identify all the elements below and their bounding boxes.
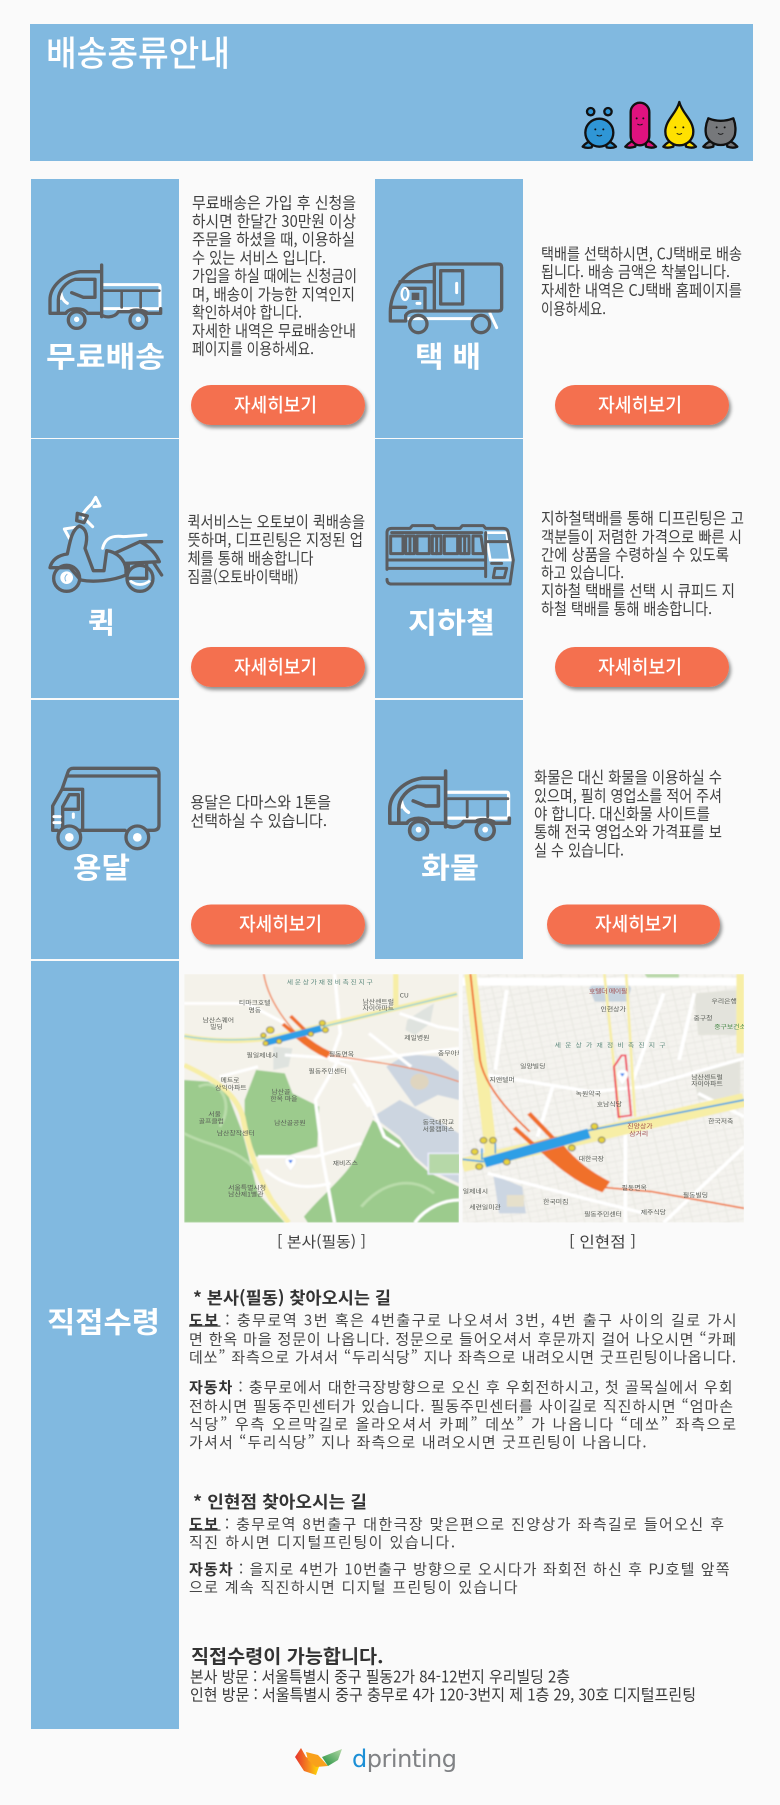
map: 본사(필동): 서울특별시청 <box>228 1183 266 1192</box>
button: 무료배송 자세히보기 <box>191 385 365 425</box>
label: 용달: 용달 <box>73 845 130 887</box>
header banner <box>30 24 753 161</box>
icon: subway train <box>387 526 513 584</box>
map: 본사(필동): 동국대학교 <box>423 1118 454 1126</box>
icon: logo mark <box>295 1748 342 1775</box>
button: 무료배송 자세히보기: 자세히보기 <box>234 390 317 418</box>
text: 용달 description: 선택하실 수 있습니다. <box>190 808 327 832</box>
text: 퀵 description <box>188 508 365 588</box>
caption: 본사(필동): [ 본사(필동) ] <box>277 1231 366 1252</box>
button: 용달 자세히보기: 자세히보기 <box>239 910 322 936</box>
text: 지하철 description: 하고 있습니다. <box>541 560 624 584</box>
button: 택배 자세히보기 <box>555 385 729 425</box>
map: 본사(필동): 명동 <box>248 1006 261 1015</box>
panel: 화물 <box>375 700 523 959</box>
button: 택배 자세히보기: 자세히보기 <box>598 390 682 418</box>
text: 무료배송 description: 무료배송은 가입 후 신청을 <box>192 190 356 214</box>
button: 지하철 자세히보기: 자세히보기 <box>598 652 682 680</box>
text: 퀵 description: 뜻하며, 디프린팅은 지정된 업 <box>188 526 363 550</box>
label: 무료배송: 무료배송 <box>46 334 165 376</box>
map: 인현점: 세운상가재정비촉진지구 <box>555 1041 666 1049</box>
panel: 퀵 <box>31 439 179 698</box>
map: 본사(필동): 필동주민센터 <box>309 1067 347 1075</box>
text: 본사 자동차: 식당” 우측 오르막길로 올라오셔서 카페” 데쏘” 가 나옵니다 “데쏘” 좌측으로 <box>189 1414 736 1434</box>
button: 용달 자세히보기 <box>191 904 365 944</box>
map: 인현점: 녹원약국 <box>576 1089 601 1098</box>
icon: scooter <box>50 497 162 591</box>
map: 인현점: 대한극장 <box>579 1154 604 1163</box>
text: 인현점 도보 <box>189 1514 724 1552</box>
text: 인현점 도보: 도보 : 충무로역 8번출구 대한극장 맞은편으로 진양상가 좌측길로 들어오신 후 <box>189 1514 724 1534</box>
logo: dprinting <box>295 1745 457 1775</box>
text: 본사 자동차: 가셔서 “두리식당” 지나 좌측으로 내려오시면 굿프린팅이 나옵니다. <box>189 1432 646 1452</box>
map: 본사(필동): 자이아파트 <box>362 1004 394 1013</box>
panel: 택배 <box>375 179 523 438</box>
panel: 직접수령 <box>31 961 179 1729</box>
text: 용달 description: 용달은 다마스와 1톤을 <box>190 789 331 813</box>
map: 본사(필동): 빌딩 <box>210 1022 223 1031</box>
text: 인현점 도보: 직진 하시면 디지털프린팅이 있습니다. <box>189 1532 455 1552</box>
text: 용달 description <box>190 789 331 832</box>
text: 택배 description <box>541 240 742 320</box>
text: 무료배송 description: 확인하셔야 합니다. <box>192 299 302 323</box>
map: 본사(필동): 삼익아파트 <box>215 1083 247 1092</box>
text: 화물 description: 있으며, 필히 영업소를 적어 주셔 <box>534 782 722 806</box>
text: 지하철 description: 객분들이 저렴한 가격으로 빠른 시 <box>541 524 742 548</box>
text: 지하철 description: 간에 상품을 수령하실 수 있도록 <box>541 542 729 566</box>
text: 무료배송 description: 페이지를 이용하세요. <box>192 336 314 360</box>
icon: cargo truck <box>390 771 509 839</box>
icon: CMYK mascots <box>583 102 737 148</box>
text: 화물 description: 실 수 있습니다. <box>534 837 624 861</box>
map: 인현점: 호남식당 <box>597 1100 622 1109</box>
map: 본사(필동): 남산창작센터 <box>217 1129 255 1138</box>
text: 화물 description <box>534 764 722 861</box>
map: 본사(필동): 제일병원 <box>404 1033 430 1042</box>
text: 화물 description: 화물은 대신 화물을 이용하실 수 <box>534 764 722 788</box>
caption: 인현점: [ 인현점 ] <box>569 1231 636 1252</box>
text: 본사 도보 <box>189 1310 736 1368</box>
map: 인현점: 인현상가 <box>601 1005 626 1013</box>
map: 인현점: 일제네시 <box>463 1187 488 1195</box>
panel: 무료배송 <box>31 179 179 438</box>
text: 지하철 description: 지하철택배를 통해 디프린팅은 고 <box>541 505 744 529</box>
text: 본사 자동차: 전하시면 필동주민센터가 있습니다. 필동주민센터를 사이길로 직진하시면 “엄마손 <box>189 1396 733 1416</box>
text: 무료배송 description: 주문을 하셨을 때, 이용하실 <box>192 226 355 250</box>
map: 본사(필동): 세운상가재정비촉진지구 <box>287 978 373 986</box>
label: 택배: 택 배 <box>415 334 481 376</box>
map: 본사(필동): 메트로 <box>221 1076 240 1085</box>
icon: free delivery truck <box>50 265 161 328</box>
map: 본사(필동): 충무아트 <box>438 1049 463 1058</box>
map: 인현점: 자이아파트 <box>691 1079 723 1088</box>
directions: 본사(필동) <box>189 1284 736 1452</box>
button: 퀵 자세히보기: 자세히보기 <box>234 652 317 680</box>
map: 인현점: 중구보건소 <box>714 1022 746 1031</box>
text: 퀵 description: 짐콜(오토바이택배) <box>188 564 298 588</box>
label: 직접수령: 직접수령 <box>47 1300 160 1342</box>
map: 인현점: 세련일미관 <box>469 1203 501 1211</box>
map: 본사(필동): 남산센트럴 <box>362 997 394 1006</box>
map: 본사(필동): 골프클럽 <box>199 1117 224 1125</box>
text: 지하철 description: 하철 택배를 통해 배송합니다. <box>541 596 712 620</box>
text: 직접수령 안내: 인현 방문 : 서울특별시 중구 충무로 4가 120-3번지 제 1층 29, 30호 디지털프린팅 <box>190 1682 696 1706</box>
text: 직접수령 안내 <box>190 1642 696 1706</box>
wordmark: dprinting <box>352 1745 457 1773</box>
text: 본사 도보: 데쏘” 좌측으로 가셔서 “두리식당” 지나 좌측으로 내려오시면 굿프린팅이나옵니다. <box>189 1346 736 1368</box>
map: 인현점: 중구청 <box>694 1014 713 1023</box>
map: 인현점: 지앤텔머 <box>490 1075 515 1084</box>
text: 지하철 description: 지하철 택배를 선택 시 큐피드 지 <box>541 578 735 602</box>
map: 본사(필동): 남산제1별관 <box>228 1190 264 1199</box>
map: 본사(필동) <box>184 974 463 1223</box>
heading: 인현점 찾아오시는 길: * 인현점 찾아오시는 길 <box>193 1488 367 1513</box>
text: 무료배송 description: 하시면 한달간 30만원 이상 <box>192 208 356 232</box>
map: 본사(필동): 필일제네시 <box>247 1051 278 1060</box>
text: 퀵 description: 퀵서비스는 오토보이 퀵배송을 <box>188 508 365 532</box>
text: 택배 description: 됩니다. 배송 금액은 착불입니다. <box>541 258 730 282</box>
icon: box truck <box>53 768 159 849</box>
map: 인현점: 한국미집 <box>543 1197 568 1206</box>
panel: 지하철 <box>375 439 523 698</box>
map: 인현점: 필동면옥 <box>622 1183 647 1192</box>
heading: 본사 찾아오시는 길: * 본사(필동) 찾아오시는 길 <box>193 1284 391 1309</box>
text: 지하철 description <box>541 505 744 620</box>
button: 퀵 자세히보기 <box>191 647 365 687</box>
text: 직접수령 안내: 직접수령이 가능합니다. <box>191 1642 384 1669</box>
text: 직접수령 안내: 본사 방문 : 서울특별시 중구 필동2가 84-12번지 우리빌딩 2층 <box>190 1664 570 1688</box>
label: 퀵: 퀵 <box>88 600 115 642</box>
text: 본사 도보: 도보 : 충무로역 3번 혹은 4번출구로 나오셔서 3번, 4번 출구 사이의 길로 가시 <box>189 1310 736 1330</box>
button: 화물 자세히보기: 자세히보기 <box>595 910 678 936</box>
text: 인현점 자동차: 자동차 : 을지로 4번가 10번출구 방향으로 오시다가 좌회전 하신 후 PJ호텔 앞쪽 <box>189 1558 730 1580</box>
text: 화물 description: 야 합니다. 대신화물 사이트를 <box>534 800 710 824</box>
label: 화물: 화물 <box>421 845 479 887</box>
button: 화물 자세히보기 <box>547 904 720 944</box>
button: 지하철 자세히보기 <box>555 647 729 687</box>
map: 인현점: 남산센트럴 <box>691 1073 723 1081</box>
text: 무료배송 description: 수 있는 서비스 입니다. <box>192 244 326 268</box>
map: 본사(필동): 서울캠퍼스 <box>423 1125 454 1133</box>
text: 택배 description: 택배를 선택하시면, CJ택배로 배송 <box>541 240 742 264</box>
text: 퀵 description: 체를 통해 배송합니다 <box>188 545 314 569</box>
map: 인현점: 한국저축 <box>708 1117 733 1125</box>
map: 본사(필동): 티마크호텔 <box>239 998 271 1007</box>
label: 지하철: 지하철 <box>408 600 495 642</box>
map: 본사(필동): 남산골 <box>271 1087 290 1096</box>
map: 인현점: 호텔더 메이필 <box>589 987 627 996</box>
text: 인현점 자동차: 으로 계속 직진하시면 디지털 프린팅이 있습니다 <box>189 1576 518 1598</box>
text: 무료배송 description: 며, 배송이 가능한 지역인지 <box>192 281 355 305</box>
map: 본사(필동): 필동면옥 <box>329 1050 354 1059</box>
map: 인현점: 필동빌딩 <box>683 1191 708 1199</box>
map: 인현점: 삼거리 <box>629 1129 648 1138</box>
map: 본사(필동): 한옥 마을 <box>270 1094 298 1103</box>
map: 인현점: 진양상가 <box>627 1122 653 1130</box>
map: 본사(필동): 서울 <box>208 1110 221 1119</box>
map: 인현점: 제주식당 <box>641 1208 666 1217</box>
text: 화물 description: 통해 전국 영업소와 가격표를 보 <box>534 818 722 842</box>
directions: 인현점 <box>189 1488 730 1598</box>
map: 본사(필동): 남산골공원 <box>274 1118 306 1127</box>
text: 무료배송 description <box>192 190 357 360</box>
title: 배송종류안내 <box>46 26 230 77</box>
map: 인현점 <box>462 974 746 1223</box>
text: 무료배송 description: 자세한 내역은 무료배송안내 <box>192 318 356 342</box>
map: 인현점: 일양빌딩 <box>520 1062 546 1070</box>
text: 택배 description: 자세한 내역은 CJ택배 홈페이지를 <box>541 277 742 301</box>
map: 본사(필동): CU <box>400 991 409 1000</box>
map: 인현점: 필동주민센터 <box>584 1210 622 1219</box>
text: 인현점 자동차 <box>189 1558 730 1598</box>
text: 본사 자동차 <box>189 1376 736 1452</box>
text: 택배 description: 이용하세요. <box>541 296 606 320</box>
map: 인현점: 우리은행 <box>712 997 737 1006</box>
map: 본사(필동): 남산스퀘어 <box>203 1016 234 1024</box>
map: 본사(필동): 재비즈스 <box>333 1159 358 1168</box>
icon: parcel van <box>390 264 502 333</box>
text: 무료배송 description: 가입을 하실 때에는 신청금이 <box>192 262 357 286</box>
text: 본사 자동차: 자동차 : 충무로에서 대한극장방향으로 오신 후 우회전하시고, 첫 골목실에서 우회 <box>189 1376 732 1398</box>
text: 본사 도보: 면 한옥 마을 정문이 나옵니다. 정문으로 들어오셔서 후문까지 걸어 나오시면 “카페 <box>189 1328 736 1350</box>
panel: 용달 <box>31 700 179 959</box>
